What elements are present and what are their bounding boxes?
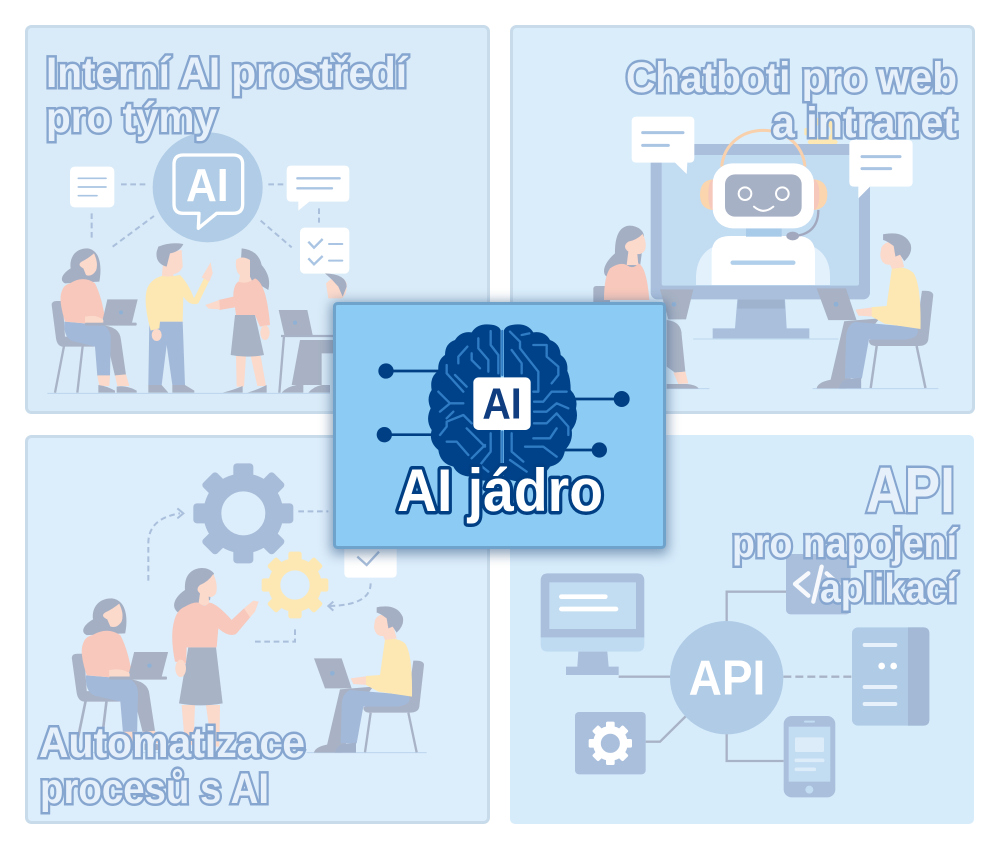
heading: procesů s AI [40,765,269,813]
icon: AI brain circuit [377,324,630,481]
panel: API pro napojení aplikací [510,435,974,824]
illustration: API hub diagram: API [689,650,765,705]
heading [732,454,958,611]
heading: a intranet [772,99,957,147]
heading [46,49,409,142]
heading: Chatboti pro web [626,54,957,102]
heading: pro týmy [46,94,217,142]
heading [626,54,957,147]
heading: aplikací [820,565,958,611]
heading [39,719,305,813]
illustration: robot on monitor with users [593,113,938,389]
title: AI jádro: AI jádro [397,457,603,524]
heading: Automatizace [39,719,305,767]
illustration: automation gears and team [63,463,427,753]
icon: AI brain circuit: AI [482,379,522,428]
heading: pro napojení [732,520,958,566]
heading: Interní AI prostředí [46,49,409,97]
illustration: team around AI hub: AI [186,159,229,211]
illustration: API hub diagram [541,554,929,797]
panel: Interní AI prostředí pro týmy [26,26,488,412]
heading: API [866,454,955,526]
illustration: team around AI hub [47,132,349,393]
panel: Automatizace procesů s AI [26,436,488,822]
panel: AI jádro (center) [331,302,668,554]
panel: Chatboti pro web a intranet [512,26,974,412]
